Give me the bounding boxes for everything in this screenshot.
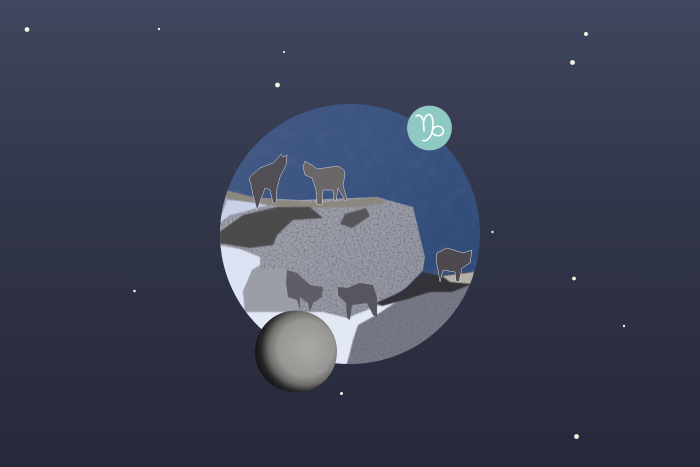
upper left snow	[218, 200, 267, 224]
rock grain	[218, 192, 482, 368]
stars	[25, 27, 625, 439]
large boulder	[218, 195, 425, 364]
sky inside disc	[220, 104, 480, 364]
lower left boulder	[243, 268, 300, 314]
Capricorn glyph	[416, 114, 444, 141]
ibex: left top	[249, 154, 287, 210]
ibex: lower left grazing	[286, 270, 323, 312]
lower left snow	[218, 245, 260, 312]
ibex: right top	[303, 161, 347, 205]
lower right rock	[348, 284, 470, 364]
snowy ledge by far right ibex	[442, 272, 474, 284]
ibex: lower right grazing	[338, 283, 377, 320]
dark rock patches	[340, 208, 370, 228]
photo disc: ibex on rocks	[218, 104, 484, 368]
planet: Mercury	[255, 310, 337, 392]
icon: Capricorn badge	[407, 106, 452, 150]
dark ledge shadow	[218, 207, 323, 248]
dark crack above lower right rock	[376, 272, 472, 306]
ibex: far right	[436, 248, 472, 282]
tan ledge top	[226, 190, 388, 208]
lower snow field	[246, 301, 398, 364]
